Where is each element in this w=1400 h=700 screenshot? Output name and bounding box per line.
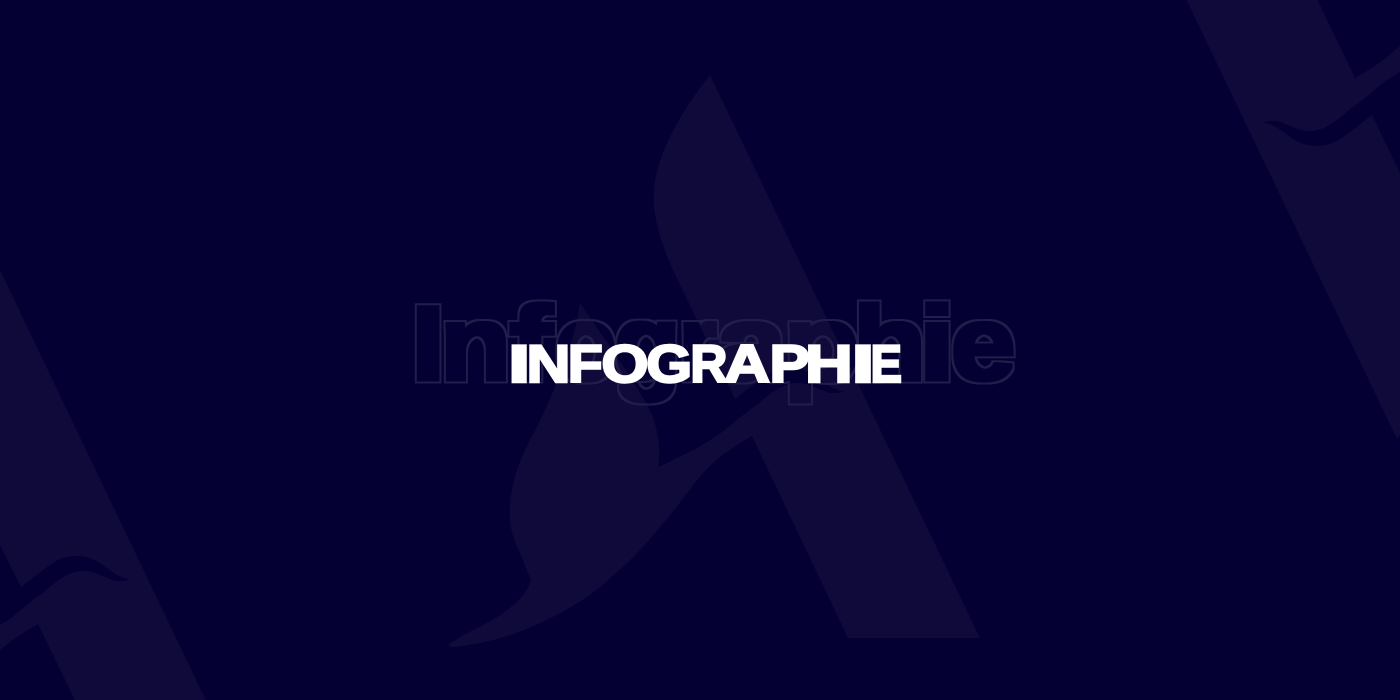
title: N: [527, 335, 570, 394]
watermark: central logo: [449, 75, 980, 647]
title: O: [602, 335, 648, 394]
outlined background word: o: [556, 286, 616, 402]
title: P: [770, 335, 810, 394]
outlined background word: g: [614, 286, 681, 402]
outlined background word: h: [852, 286, 926, 402]
outlined background word: r: [679, 286, 716, 402]
title: R: [690, 335, 727, 394]
outlined background word: I: [410, 286, 446, 402]
title: A: [724, 335, 770, 394]
title: H: [805, 335, 853, 394]
outlined background word: f: [509, 286, 554, 402]
title: G: [646, 335, 692, 394]
outlined background word: a: [716, 286, 789, 402]
outlined background word: i: [917, 286, 957, 402]
outlined background word: n: [440, 286, 511, 402]
title: E: [870, 335, 902, 394]
watermark: top-right logo: [1186, 0, 1400, 439]
outlined background word: e: [951, 286, 1016, 402]
title: F: [568, 335, 603, 394]
watermark: bottom-left logo: [0, 270, 206, 700]
title: I: [852, 335, 874, 394]
outlined background word: p: [783, 286, 860, 402]
title: I: [508, 335, 530, 394]
